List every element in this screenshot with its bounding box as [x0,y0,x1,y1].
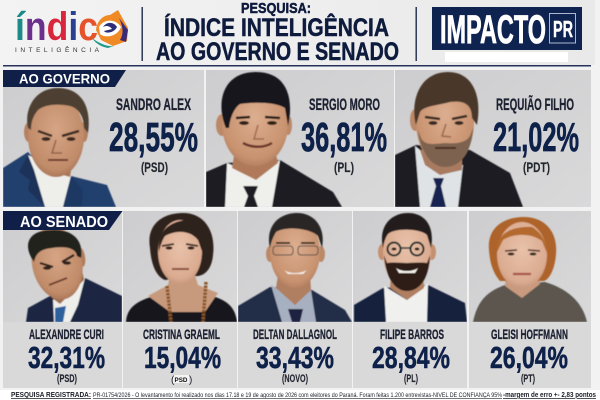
candidate text: Cristina Graeml: CRISTINA GRAEML [143,326,220,342]
candidate text: Filipe Barros: FILIPE BARROS [380,326,444,342]
tab: Ao Governo: AO GOVERNO [19,70,110,86]
heading: pesquisa: AO GOVERNO E SENADO [156,38,399,66]
heading: pesquisa [156,0,399,66]
heading: pesquisa: ÍNDICE INTELIGÊNCIA [164,12,389,42]
candidate text: Gleisi Hoffmann [490,326,568,385]
candidate text: Filipe Barros [372,326,450,385]
party label: PSD [171,375,192,386]
panel: Filipe Barros [353,211,467,388]
candidate text: Deltan Dallagnol: DELTAN DALLAGNOL [253,326,337,342]
party label: PSD: PSD [174,377,188,384]
divider left [142,7,143,61]
candidate text: Sergio Moro: (PL) [334,159,354,175]
logo: Índice Inteligência: índic [15,5,98,49]
divider right [416,7,417,61]
party label: PSD: ( [171,375,175,386]
portrait: Cristina Graeml [126,213,237,322]
candidate text: Sergio Moro: SERGIO MORO [309,96,380,114]
portrait: Gleisi Hoffmann [473,217,587,322]
panel: Deltan Dallagnol [238,211,352,388]
panel: Sergio Moro [206,70,394,207]
panel: Requião Filho [395,70,591,207]
portrait: Filipe Barros [354,213,467,322]
candidate text: Filipe Barros: 28,84% [372,340,450,375]
logo: Índice Inteligência [15,5,128,54]
panel: Gleisi Hoffmann [469,211,591,388]
portrait: Requião Filho [395,72,523,207]
candidate text: Alexandre Curi: ALEXANDRE CURI [29,326,104,342]
candidate text: Alexandre Curi [28,326,105,385]
candidate text: Alexandre Curi: (PSD) [57,373,77,385]
candidate text: Sandro Alex [109,96,198,175]
footer band [0,390,600,400]
candidate text: Cristina Graeml [143,326,221,375]
candidate text: Requião Filho [493,94,579,175]
candidate text: Requião Filho: (PDT) [523,159,550,175]
heading: pesquisa: PESQUISA: [241,0,311,17]
header rule [3,65,591,66]
footer: survey registration note: PESQUISA REGISTRADA: [11,390,91,399]
tab: Ao Senado: AO SENADO [20,214,108,231]
tab: Ao Senado [3,211,122,231]
candidate text: Sergio Moro [301,96,387,175]
candidate text: Sandro Alex: (PSD) [141,159,168,175]
candidate text: Sergio Moro: 36,81% [301,114,387,160]
candidate text: Gleisi Hoffmann: 26,04% [490,340,568,375]
candidate text: Deltan Dallagnol [253,326,337,385]
footer: survey registration note: PR-01754/2026 - O levantamento foi realizado nos dias 17.18 e 19 de agosto de 2026 com eleitores do Paraná. Foram feitas 1.200 entrevistas-NIVEL DE CONFIANÇA 95% [93,393,503,399]
panel: Alexandre Curi [3,211,122,388]
panel: Sandro Alex [3,70,204,207]
candidate text: Cristina Graeml: 15,04% [144,340,221,375]
candidate text: Filipe Barros: (PL) [404,373,418,385]
header [0,0,595,66]
logo: Índice Inteligência: INTELIGÊNCIA [15,45,100,54]
candidate text: Sandro Alex: 28,55% [109,114,198,160]
portrait: Sandro Alex [3,88,116,207]
candidate text: Deltan Dallagnol: 33,43% [256,340,334,375]
footer: survey registration note [11,390,596,399]
portrait: Deltan Dallagnol [238,213,352,322]
logo: Impacto PR: PR [553,16,573,42]
panel: Cristina Graeml [123,211,237,388]
party label: PSD: ) [189,375,192,386]
candidate text: Gleisi Hoffmann: (PT) [521,373,535,385]
portrait: Alexandre Curi [25,222,122,322]
candidate text: Sandro Alex: SANDRO ALEX [116,96,191,114]
portrait: Sergio Moro [206,72,342,207]
candidate text: Deltan Dallagnol: (NOVO) [282,373,308,385]
candidate text: Alexandre Curi: 32,31% [28,340,105,375]
logo: Impacto PR [432,7,582,62]
